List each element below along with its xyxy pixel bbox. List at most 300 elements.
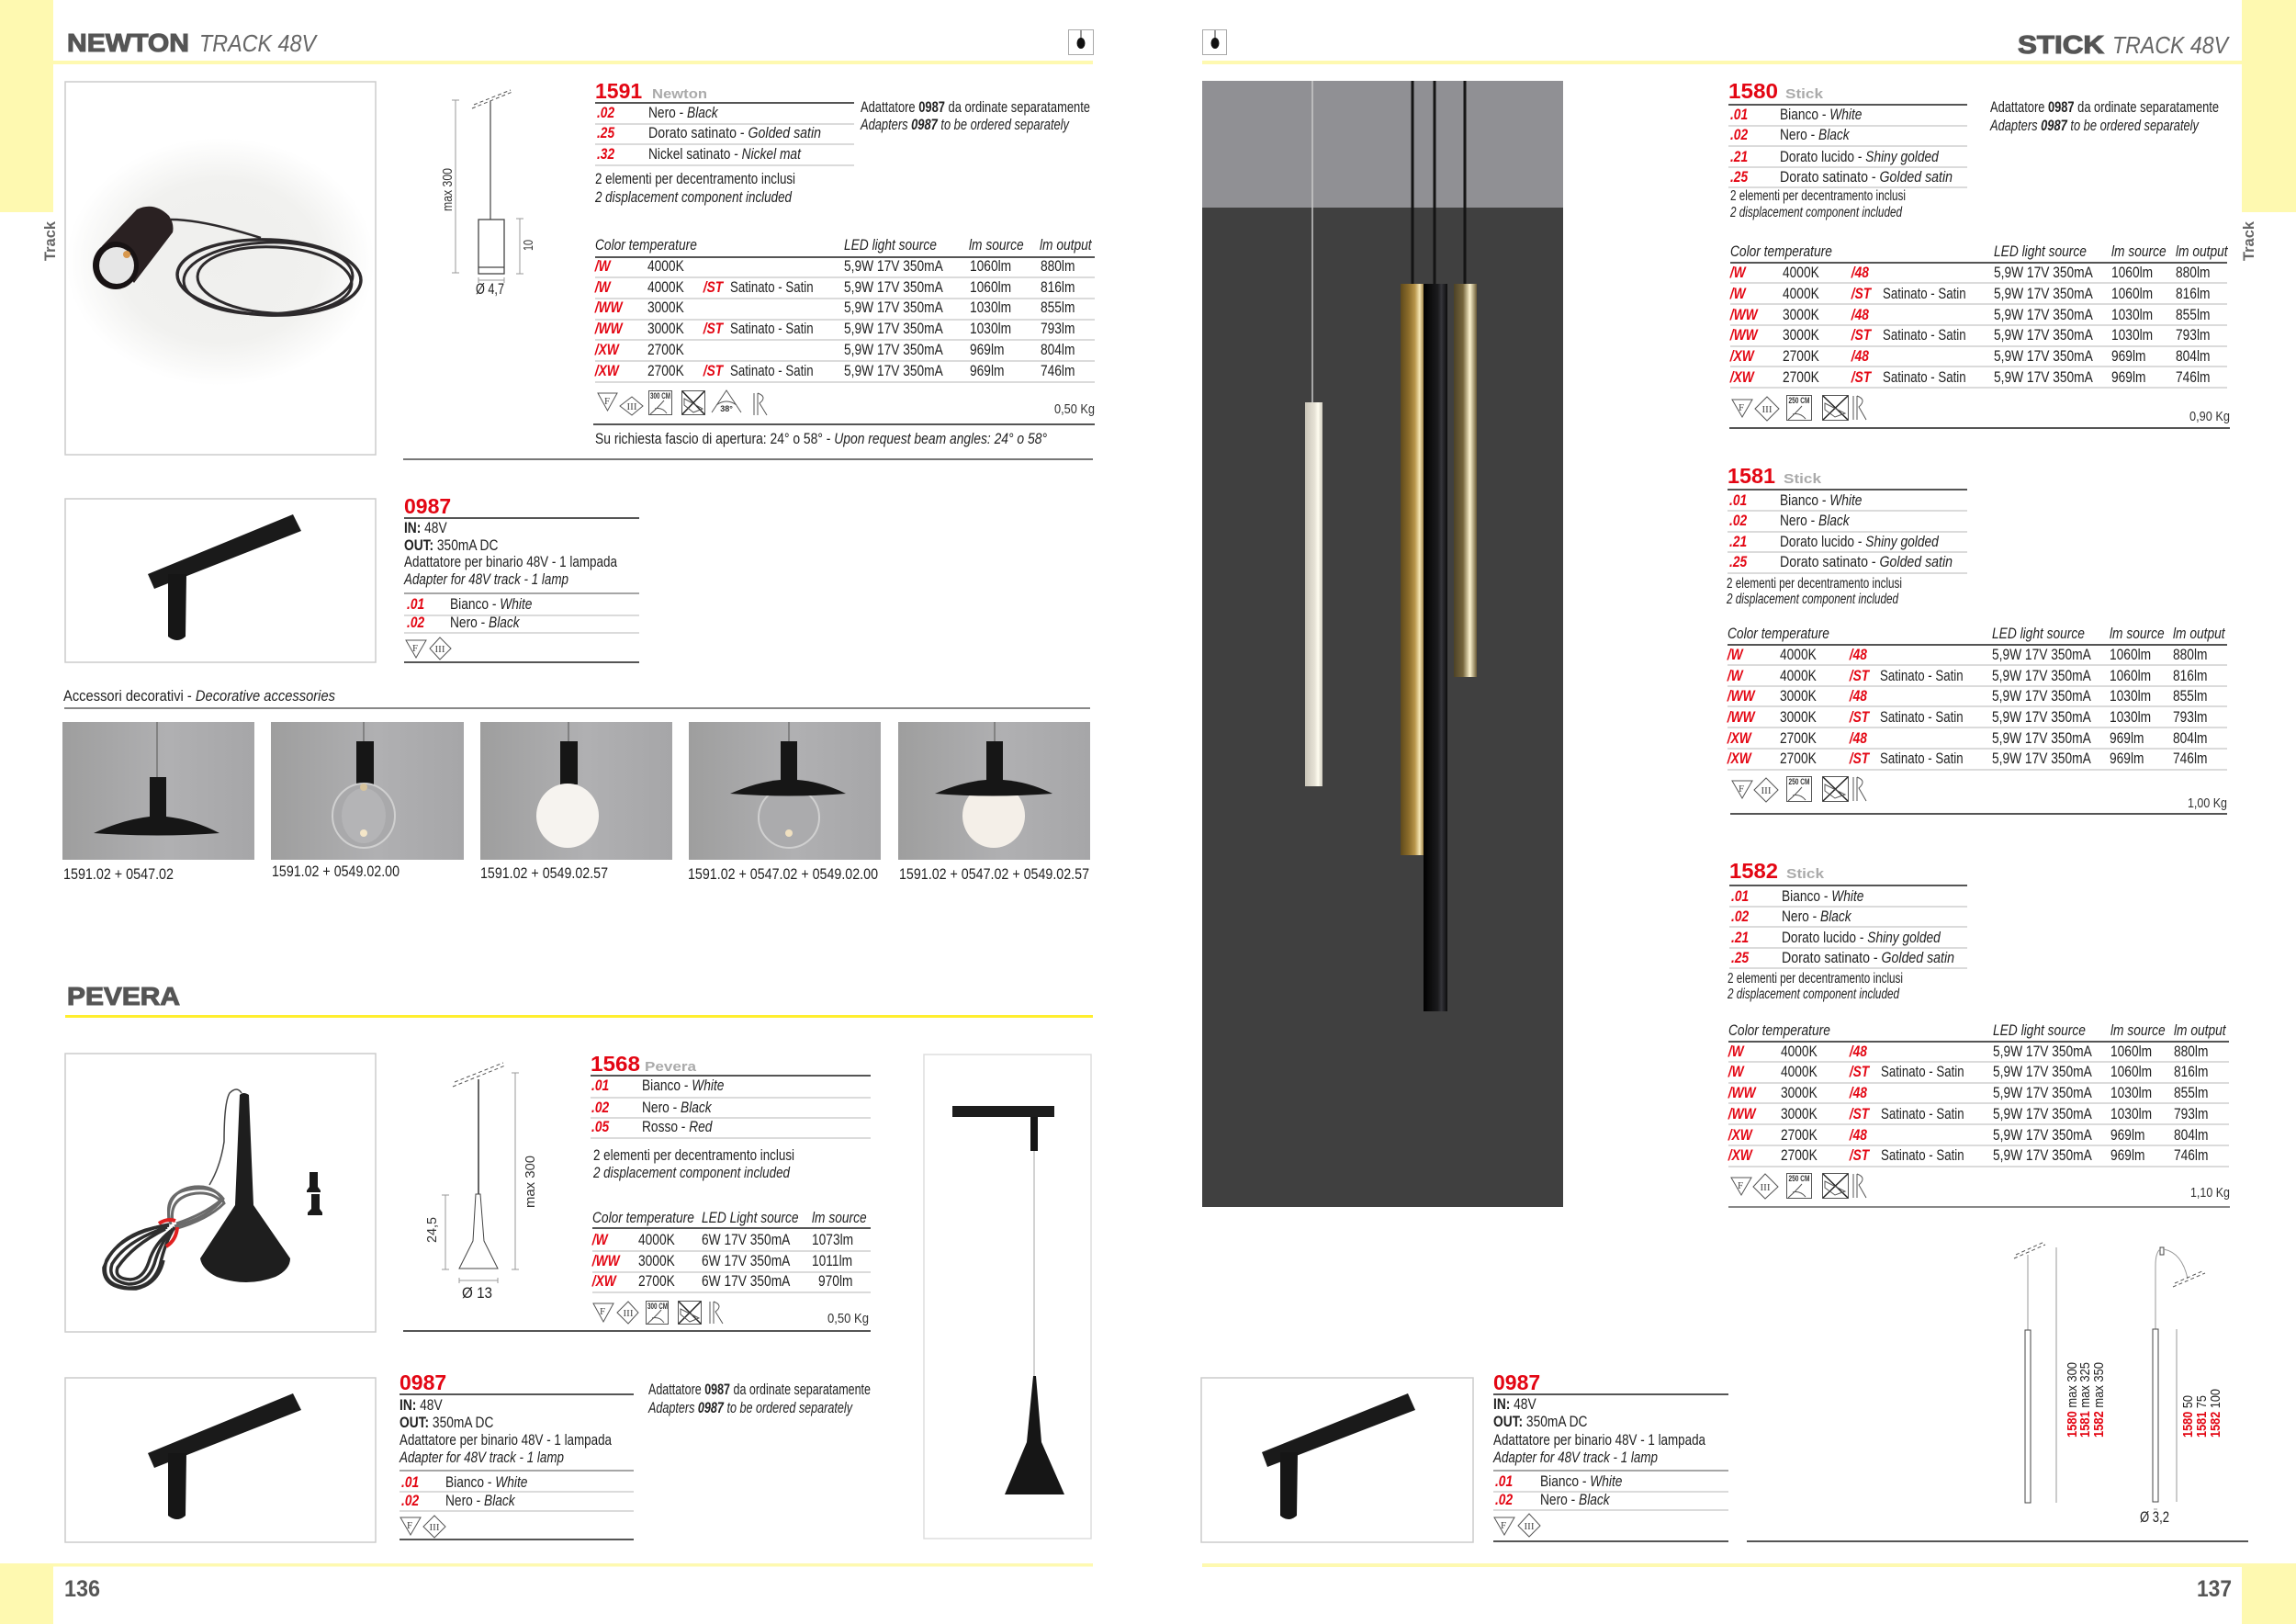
table: 1581 specifications: /WW — [1727, 688, 1756, 705]
product block: 0987 adapter, Stick section: F — [1501, 1520, 1506, 1531]
table: 1582 specifications: 1060lm — [2110, 1043, 2152, 1060]
technical drawing: Pevera: Ø 13 — [462, 1284, 492, 1302]
product block: 1568 Pevera finishes: 1568 — [591, 1052, 640, 1076]
product block: 1581 Stick finishes: Dorato lucido - Shiny golded — [1780, 534, 1939, 550]
right footer tab — [2242, 1563, 2296, 1624]
footer right: page number 137 — [1202, 1563, 2242, 1602]
table: 1582 specifications: Satinato - Satin — [1881, 1064, 1964, 1080]
photo: 0987 adapter, Newton section — [65, 499, 376, 662]
product block: 1591 Newton finishes: Dorato satinato - Golded satin — [648, 124, 821, 141]
table: 1581 specifications: 2700K — [1780, 730, 1817, 747]
table: 1568 specifications: 6W 17V 350mA — [702, 1273, 791, 1290]
technical drawing: Stick with offset canopy: 1581 75 — [2194, 1395, 2210, 1438]
table: 1591 specifications: /WW — [594, 321, 624, 337]
product block: 1591 Newton finishes: .32 — [597, 146, 614, 163]
table: 1580 specifications: 880lm — [2176, 265, 2210, 281]
table: 1581 specifications: 5,9W 17V 350mA — [1992, 688, 2091, 705]
product block: 1580 Stick finishes — [1728, 79, 1967, 220]
photo: accessory 1591.02 + 0549.02.00 — [271, 722, 464, 880]
icons: 1581 certification symbols: III — [1761, 785, 1772, 796]
table: 1582 specifications: 2700K — [1781, 1127, 1818, 1144]
product block: 1580 Stick finishes: Bianco - White — [1780, 107, 1863, 123]
footer right: page number 137: 137 — [2197, 1576, 2232, 1602]
table: 1580 specifications: /ST — [1851, 369, 1873, 386]
product block: 1581 Stick finishes: Dorato satinato - Golded satin — [1780, 553, 1953, 570]
table: 1568 specifications: LED Light source — [702, 1210, 799, 1226]
technical drawing: Stick wire suspended: 1582 max 350 — [2091, 1362, 2107, 1438]
photo: accessory 1591.02 + 0549.02.00: 1591.02 + 0549.02.00 — [272, 863, 400, 880]
table: 1580 specifications: 2700K — [1783, 348, 1819, 365]
weight: 1,10 Kg: 1,10 Kg — [2190, 1185, 2230, 1201]
table: 1581 specifications: 2700K — [1780, 750, 1817, 767]
icons: 1568 certification symbols: F — [600, 1306, 605, 1317]
photo: Stick pendants — [1202, 81, 1563, 1207]
table: 1581 specifications: 746lm — [2173, 750, 2207, 767]
table: 1580 specifications: 5,9W 17V 350mA — [1994, 327, 2093, 344]
technical drawing: Newton: Ø 4,7 — [476, 280, 504, 298]
table: 1582 specifications: 4000K — [1781, 1064, 1818, 1080]
product block: 1580 Stick finishes: 1580 — [1728, 79, 1778, 103]
photo: accessory 1591.02 + 0549.02.57 — [480, 722, 672, 882]
table: 1581 specifications: /48 — [1849, 647, 1867, 663]
product block: 0987 adapter, Pevera section — [399, 1370, 634, 1539]
product block: 0987 adapter, Stick section — [1492, 1370, 1728, 1541]
table: 1581 specifications: /ST — [1849, 709, 1871, 726]
product block: 1580 Stick finishes: 2 elementi per decentramento inclusi — [1730, 188, 1906, 204]
product block: 0987 adapter, Newton section: 0987 — [404, 494, 451, 518]
photo: Pevera pendant — [65, 1054, 376, 1332]
icon: pendant category left — [1069, 29, 1093, 55]
divider under 1582 — [1728, 1206, 2230, 1208]
table: 1582 specifications: /48 — [1849, 1085, 1867, 1101]
table: 1580 specifications: /ST — [1851, 286, 1873, 302]
icons: 1581 certification symbols: F — [1739, 784, 1744, 795]
weight: 0,50 Kg: 0,50 Kg — [1054, 401, 1095, 417]
table: 1591 specifications: 5,9W 17V 350mA — [844, 321, 943, 337]
product block: 1568 Pevera finishes: Bianco - White — [642, 1077, 725, 1094]
product block: 0987 adapter, Pevera section: Adattatore per binario 48V - 1 lampada — [400, 1431, 612, 1449]
product block: 1581 Stick finishes: 2 elementi per decentramento inclusi — [1727, 576, 1902, 592]
note: adapter to be ordered separately — [647, 1381, 871, 1416]
table: 1580 specifications: Color temperature — [1730, 243, 1832, 260]
icons: 1591 certification symbols — [598, 390, 767, 415]
heading: Stick Track 48V — [1202, 30, 2242, 64]
table: 1580 specifications: 3000K — [1783, 307, 1819, 323]
technical drawing: Pevera: 24,5 — [424, 1217, 440, 1243]
product block: 1581 Stick finishes: Bianco - White — [1780, 492, 1863, 509]
photo: accessory 1591.02 + 0547.02 + 0549.02.00 — [688, 722, 881, 883]
table: 1580 specifications: LED light source — [1994, 243, 2087, 260]
technical drawing: Newton: max 300 — [440, 168, 456, 211]
product block: 1582 Stick finishes: Bianco - White — [1782, 888, 1864, 905]
technical drawing: Stick with offset canopy — [2140, 1247, 2223, 1526]
icons: 1591 certification symbols: 38° — [720, 404, 733, 413]
product block: 1582 Stick finishes: Dorato satinato - Golded satin — [1782, 949, 1954, 966]
table: 1591 specifications: 2700K — [647, 342, 684, 358]
table: 1580 specifications: 5,9W 17V 350mA — [1994, 307, 2093, 323]
table: 1582 specifications: 4000K — [1781, 1043, 1818, 1060]
table: 1581 specifications: 793lm — [2173, 709, 2207, 726]
table: 1582 specifications: /ST — [1849, 1147, 1871, 1164]
photo: Newton pendant — [65, 82, 376, 455]
table: 1568 specifications: 1011lm — [812, 1253, 852, 1269]
table: 1581 specifications: 1060lm — [2110, 647, 2151, 663]
table: 1568 specifications: 1073lm — [812, 1232, 853, 1248]
table: 1568 specifications: 3000K — [638, 1253, 675, 1269]
table: 1581 specifications: /W — [1727, 647, 1744, 663]
table: 1581 specifications: 4000K — [1780, 647, 1817, 663]
table: 1582 specifications: /48 — [1849, 1127, 1867, 1144]
table: 1581 specifications: 969lm — [2110, 730, 2144, 747]
photo: accessory 1591.02 + 0547.02 — [62, 722, 254, 883]
table: 1582 specifications: 816lm — [2174, 1064, 2208, 1080]
table: 1568 specifications: /WW — [591, 1253, 621, 1269]
note: adapter to be ordered separately: Adattatore 0987 da ordinate separatamente — [648, 1381, 871, 1398]
table: 1580 specifications: /48 — [1851, 265, 1869, 281]
product block: 1568 Pevera finishes: Pevera — [645, 1059, 697, 1075]
table: 1582 specifications: Satinato - Satin — [1881, 1106, 1964, 1122]
product block: 1568 Pevera finishes: .05 — [591, 1119, 609, 1135]
table: 1580 specifications: 1060lm — [2111, 265, 2153, 281]
photo: Pevera on track — [924, 1054, 1091, 1539]
table: 1580 specifications: 5,9W 17V 350mA — [1994, 265, 2093, 281]
product block: 0987 adapter, Newton section: Nero - Black — [450, 615, 521, 631]
table: 1582 specifications: 1030lm — [2110, 1106, 2152, 1122]
product block: 1582 Stick finishes — [1727, 859, 1967, 1002]
product block: 1581 Stick finishes: .25 — [1729, 554, 1747, 570]
product block: 0987 adapter, Pevera section: Nero - Black — [445, 1493, 516, 1509]
table: 1580 specifications: Satinato - Satin — [1883, 286, 1966, 302]
product block: 1568 Pevera finishes: Nero - Black — [642, 1100, 713, 1116]
table: 1591 specifications: 880lm — [1041, 258, 1075, 275]
product block: 1580 Stick finishes: Nero - Black — [1780, 127, 1851, 143]
table: 1591 specifications: /ST — [703, 279, 725, 296]
table: 1580 specifications: 5,9W 17V 350mA — [1994, 369, 2093, 386]
table: 1582 specifications: 880lm — [2174, 1043, 2208, 1060]
product block: 1591 Newton finishes: 2 elementi per decentramento inclusi — [595, 170, 795, 187]
technical drawing: Newton — [440, 90, 536, 298]
table: 1568 specifications — [591, 1210, 871, 1292]
table: 1591 specifications: 5,9W 17V 350mA — [844, 258, 943, 275]
table: 1591 specifications: 804lm — [1041, 342, 1075, 358]
product block: 1581 Stick finishes: 2 displacement component included — [1726, 592, 1899, 607]
table: 1591 specifications: 5,9W 17V 350mA — [844, 299, 943, 316]
product block: 1580 Stick finishes: .01 — [1730, 107, 1748, 123]
note: adapter to be ordered separately: Adapters 0987 to be ordered separately — [647, 1399, 853, 1416]
weight: 0,90 Kg: 0,90 Kg — [2189, 409, 2230, 424]
product block: 0987 adapter, Stick section: IN: 48V — [1493, 1396, 1536, 1413]
table: 1582 specifications: 969lm — [2110, 1147, 2144, 1164]
product block: 0987 adapter, Stick section: 0987 — [1493, 1370, 1540, 1394]
product block: 1580 Stick finishes: Dorato satinato - Golded satin — [1780, 168, 1953, 186]
product block: 1582 Stick finishes: .01 — [1731, 888, 1749, 905]
table: 1591 specifications: /ST — [703, 321, 725, 337]
table: 1582 specifications: 2700K — [1781, 1147, 1818, 1164]
table: 1591 specifications: 969lm — [970, 342, 1004, 358]
product block: 1581 Stick finishes: .01 — [1729, 492, 1747, 509]
table: 1580 specifications: /XW — [1729, 369, 1755, 386]
table: 1581 specifications: /ST — [1849, 750, 1871, 767]
table: 1582 specifications: 969lm — [2110, 1127, 2144, 1144]
table: 1581 specifications: /XW — [1727, 750, 1752, 767]
table: 1580 specifications: /48 — [1851, 348, 1869, 365]
icons: 1581 certification symbols — [1732, 777, 1866, 802]
table: 1580 specifications — [1729, 243, 2228, 388]
product block: 1568 Pevera finishes: .02 — [591, 1100, 609, 1116]
table: 1580 specifications: 969lm — [2111, 348, 2145, 365]
heading: Newton Track 48V — [53, 28, 1093, 64]
table: 1591 specifications: 4000K — [647, 258, 684, 275]
product block: 1581 Stick finishes: Nero - Black — [1780, 513, 1851, 529]
product block: 0987 adapter, Pevera section: Bianco - White — [445, 1474, 528, 1491]
table: 1582 specifications: 804lm — [2174, 1127, 2208, 1144]
product block: 0987 adapter, Pevera section: 0987 — [400, 1370, 446, 1394]
table: 1581 specifications: 5,9W 17V 350mA — [1992, 709, 2091, 726]
table: 1580 specifications: 855lm — [2176, 307, 2210, 323]
product block: 0987 adapter, Newton section: Adattatore per binario 48V - 1 lampada — [404, 553, 617, 570]
table: 1581 specifications: 5,9W 17V 350mA — [1992, 647, 2091, 663]
table: 1582 specifications: Color temperature — [1728, 1022, 1830, 1039]
product block: 0987 adapter, Newton section: IN: 48V — [404, 520, 447, 536]
product block: 1591 Newton finishes: .25 — [597, 125, 614, 141]
icons: 1580 certification symbols: 250 CM — [1789, 396, 1809, 405]
table: 1591 specifications: Satinato - Satin — [730, 363, 814, 379]
product block: 1580 Stick finishes: .25 — [1730, 169, 1748, 186]
product block: 1568 Pevera finishes: .01 — [591, 1077, 609, 1094]
table: 1580 specifications: /W — [1729, 286, 1747, 302]
left page header tab — [0, 0, 53, 212]
table: 1581 specifications: 3000K — [1780, 709, 1817, 726]
icons: 1568 certification symbols: III — [623, 1308, 634, 1319]
product block: 1568 Pevera finishes: Rosso - Red — [642, 1119, 713, 1135]
product block: 0987 adapter, Newton section: F — [412, 643, 418, 654]
table: 1581 specifications: Color temperature — [1728, 626, 1829, 642]
table: 1582 specifications: 5,9W 17V 350mA — [1993, 1147, 2092, 1164]
technical drawing: Stick wire suspended — [2014, 1242, 2107, 1503]
table: 1581 specifications: /48 — [1849, 730, 1867, 747]
product block: 0987 adapter, Newton section: Adapter for 48V track - 1 lamp — [403, 570, 568, 588]
product block: 1580 Stick finishes: 2 displacement component included — [1729, 205, 1903, 220]
table: 1582 specifications: 793lm — [2174, 1106, 2208, 1122]
product block: 1582 Stick finishes: Stick — [1786, 866, 1825, 882]
table: 1582 specifications: /WW — [1728, 1085, 1757, 1101]
table: 1582 specifications: 855lm — [2174, 1085, 2208, 1101]
table: 1591 specifications: 3000K — [647, 299, 684, 316]
table: 1568 specifications: 6W 17V 350mA — [702, 1253, 791, 1269]
product block: 1568 Pevera finishes: 2 displacement component included — [592, 1164, 790, 1181]
table: 1580 specifications: 5,9W 17V 350mA — [1994, 286, 2093, 302]
table: 1580 specifications: /WW — [1729, 307, 1759, 323]
table: 1581 specifications: Satinato - Satin — [1880, 750, 1964, 767]
table: 1580 specifications: 1030lm — [2111, 327, 2153, 344]
note: beam angles: Su richiesta fascio di apertura: 24° o 58° - Upon request beam angles: 24° o 58° — [595, 430, 1047, 447]
product block: 1582 Stick finishes: 1582 — [1729, 859, 1778, 883]
table: 1591 specifications: 3000K — [647, 321, 684, 337]
technical drawing: Pevera: max 300 — [523, 1156, 538, 1208]
table: 1580 specifications: 2700K — [1783, 369, 1819, 386]
table: 1581 specifications: 5,9W 17V 350mA — [1992, 750, 2091, 767]
table: 1580 specifications: 1030lm — [2111, 307, 2153, 323]
icons: 1591 certification symbols: F — [604, 396, 610, 407]
icons: 1568 certification symbols: 300 CM — [647, 1302, 668, 1311]
product block: 1581 Stick finishes: .02 — [1729, 513, 1747, 529]
table: 1581 specifications: lm output — [2173, 626, 2225, 642]
table: 1568 specifications: Color temperature — [592, 1210, 694, 1226]
table: 1580 specifications: 1060lm — [2111, 286, 2153, 302]
icons: 1580 certification symbols — [1732, 395, 1866, 421]
product block: 1582 Stick finishes: .02 — [1731, 908, 1749, 925]
table: 1581 specifications: 969lm — [2110, 750, 2144, 767]
table: 1591 specifications — [594, 237, 1095, 382]
table: 1581 specifications: Satinato - Satin — [1880, 709, 1964, 726]
product block: 1582 Stick finishes: Nero - Black — [1782, 908, 1852, 925]
table: 1580 specifications: 4000K — [1783, 286, 1819, 302]
product block: 1568 Pevera finishes: 2 elementi per decentramento inclusi — [593, 1146, 794, 1164]
product block: 0987 adapter, Pevera section: OUT: 350mA DC — [400, 1415, 493, 1431]
table: 1581 specifications: 880lm — [2173, 647, 2207, 663]
product block: 0987 adapter, Pevera section: .02 — [401, 1493, 419, 1509]
divider under Pevera block — [403, 1330, 871, 1332]
technical drawing: Stick with offset canopy: Ø 3,2 — [2140, 1508, 2169, 1526]
table: 1580 specifications: /W — [1729, 265, 1747, 281]
table: 1591 specifications: 969lm — [970, 363, 1004, 379]
note: adapter to be ordered separately: Adapters 0987 to be ordered separately — [1989, 117, 2200, 134]
product block: 1581 Stick finishes: .21 — [1729, 534, 1747, 550]
note: adapter to be ordered separately: Adapters 0987 to be ordered separately — [860, 116, 1070, 133]
table: 1581 specifications: /WW — [1727, 709, 1756, 726]
product block: 1580 Stick finishes: .02 — [1730, 127, 1748, 143]
product block: 1591 Newton finishes: Newton — [652, 86, 707, 102]
table: 1581 specifications: lm source — [2110, 626, 2165, 642]
product block: 0987 adapter, Pevera section: .01 — [401, 1474, 419, 1491]
photo: 0987 adapter, Stick section — [1201, 1378, 1473, 1542]
product block: 1582 Stick finishes: 2 elementi per decentramento inclusi — [1728, 971, 1903, 987]
divider under 1581 — [1730, 813, 2227, 815]
product block: 1591 Newton finishes: 2 displacement component included — [594, 188, 792, 206]
icon: pendant category right — [1203, 29, 1227, 55]
divider under Stick drawings — [1747, 1540, 2248, 1542]
table: 1581 specifications: 4000K — [1780, 668, 1817, 684]
table: 1591 specifications: /XW — [594, 363, 620, 379]
product block: 0987 adapter, Stick section: OUT: 350mA DC — [1493, 1414, 1587, 1430]
table: 1581 specifications: 1060lm — [2110, 668, 2151, 684]
product block: 0987 adapter, Newton section: Bianco - White — [450, 596, 533, 613]
left section label: Track: Track — [41, 220, 59, 261]
product block: 0987 adapter, Newton section: .02 — [407, 615, 424, 631]
product block: 1582 Stick finishes: Dorato lucido - Shiny golded — [1782, 930, 1941, 946]
note: adapter to be ordered separately — [1989, 98, 2219, 134]
table: 1591 specifications: 1030lm — [970, 321, 1011, 337]
table: 1591 specifications: /W — [594, 279, 612, 296]
note: adapter to be ordered separately: Adattatore 0987 da ordinate separatamente — [1990, 98, 2219, 116]
table: 1581 specifications: LED light source — [1992, 626, 2085, 642]
table: 1580 specifications: 816lm — [2176, 286, 2210, 302]
table: 1591 specifications: /XW — [594, 342, 620, 358]
table: 1591 specifications: /ST — [703, 363, 725, 379]
table: 1582 specifications: /XW — [1728, 1127, 1753, 1144]
table: 1591 specifications: 1060lm — [970, 258, 1011, 275]
table: 1582 specifications: 5,9W 17V 350mA — [1993, 1127, 2092, 1144]
table: 1582 specifications: /WW — [1728, 1106, 1757, 1122]
table: 1591 specifications: Color temperature — [595, 237, 697, 254]
table: 1582 specifications: /ST — [1849, 1106, 1871, 1122]
table: 1580 specifications: /48 — [1851, 307, 1869, 323]
table: 1568 specifications: 970lm — [818, 1273, 852, 1290]
product block: 0987 adapter, Newton section — [403, 494, 639, 662]
table: 1582 specifications: 5,9W 17V 350mA — [1993, 1106, 2092, 1122]
footer left: page number 136: 136 — [64, 1576, 100, 1602]
heading: Pevera: PEVERA — [67, 982, 180, 1010]
table: 1581 specifications: /W — [1727, 668, 1744, 684]
technical drawing: Stick wire suspended: 1580 max 300 — [2065, 1362, 2080, 1438]
icons: 1581 certification symbols: 250 CM — [1789, 777, 1809, 786]
note: adapter to be ordered separately: Adattatore 0987 da ordinate separatamente — [861, 98, 1090, 116]
table: 1568 specifications: /W — [591, 1232, 609, 1248]
table: 1582 specifications — [1728, 1022, 2229, 1167]
icons: 1580 certification symbols: III — [1761, 404, 1773, 415]
icons: 1582 certification symbols — [1731, 1174, 1866, 1199]
table: 1591 specifications: 1030lm — [970, 299, 1011, 316]
table: 1581 specifications: 855lm — [2173, 688, 2207, 705]
table: 1582 specifications: 5,9W 17V 350mA — [1993, 1043, 2092, 1060]
table: 1580 specifications: /XW — [1729, 348, 1755, 365]
table: 1581 specifications: /XW — [1727, 730, 1752, 747]
table: 1568 specifications: /XW — [591, 1273, 617, 1290]
table: 1582 specifications: lm source — [2110, 1022, 2166, 1039]
product block: 1580 Stick finishes: Dorato lucido - Shiny golded — [1780, 149, 1939, 165]
table: 1591 specifications: 793lm — [1041, 321, 1075, 337]
table: 1580 specifications: 3000K — [1783, 327, 1819, 344]
table: 1580 specifications: /WW — [1729, 327, 1759, 344]
product block: 0987 adapter, Stick section: Adattatore per binario 48V - 1 lampada — [1493, 1431, 1705, 1449]
accessories heading: Accessori decorativi - Decorative accessories — [63, 687, 335, 705]
table: 1591 specifications: lm source — [969, 237, 1024, 254]
table: 1591 specifications: 5,9W 17V 350mA — [844, 279, 943, 296]
product block: 0987 adapter, Stick section: Bianco - White — [1540, 1473, 1623, 1490]
product block: 0987 adapter, Newton section: III — [435, 644, 445, 655]
product block: 0987 adapter, Pevera section: III — [430, 1522, 440, 1533]
table: 1580 specifications: Satinato - Satin — [1883, 369, 1966, 386]
table: 1580 specifications: 746lm — [2176, 369, 2210, 386]
table: 1582 specifications: /48 — [1849, 1043, 1867, 1060]
table: 1581 specifications: 5,9W 17V 350mA — [1992, 730, 2091, 747]
photo: accessory 1591.02 + 0549.02.57: 1591.02 + 0549.02.57 — [480, 864, 608, 882]
table: 1581 specifications: /48 — [1849, 688, 1867, 705]
table: 1591 specifications: 816lm — [1041, 279, 1075, 296]
table: 1580 specifications: 804lm — [2176, 348, 2210, 365]
product block: 1581 Stick finishes — [1726, 464, 1967, 607]
right page header tab — [2242, 0, 2296, 212]
product block: 0987 adapter, Stick section: Adapter for 48V track - 1 lamp — [1492, 1449, 1658, 1466]
icons: 1582 certification symbols: 250 CM — [1789, 1174, 1809, 1183]
icons: 1580 certification symbols: F — [1739, 402, 1744, 413]
product block: 0987 adapter, Stick section: .01 — [1495, 1473, 1513, 1490]
product block: 1581 Stick finishes: 1581 — [1728, 464, 1775, 488]
table: 1582 specifications: 1030lm — [2110, 1085, 2152, 1101]
technical drawing: Pevera — [424, 1063, 538, 1302]
product block: 1591 Newton finishes: .02 — [597, 105, 614, 121]
table: 1582 specifications: /W — [1728, 1043, 1745, 1060]
product block: 0987 adapter, Newton section: OUT: 350mA DC — [404, 537, 498, 554]
icons: 1582 certification symbols: III — [1760, 1182, 1771, 1193]
table: 1582 specifications: /XW — [1728, 1147, 1753, 1164]
table: 1582 specifications: /W — [1728, 1064, 1745, 1080]
table: 1582 specifications: 746lm — [2174, 1147, 2208, 1164]
heading: Newton Track 48V: TRACK 48V — [199, 29, 318, 57]
technical drawing: Stick wire suspended: 1581 max 325 — [2077, 1362, 2093, 1438]
icons: 1591 certification symbols: III — [626, 401, 637, 412]
photo: accessory 1591.02 + 0547.02 + 0549.02.57 — [898, 722, 1090, 883]
